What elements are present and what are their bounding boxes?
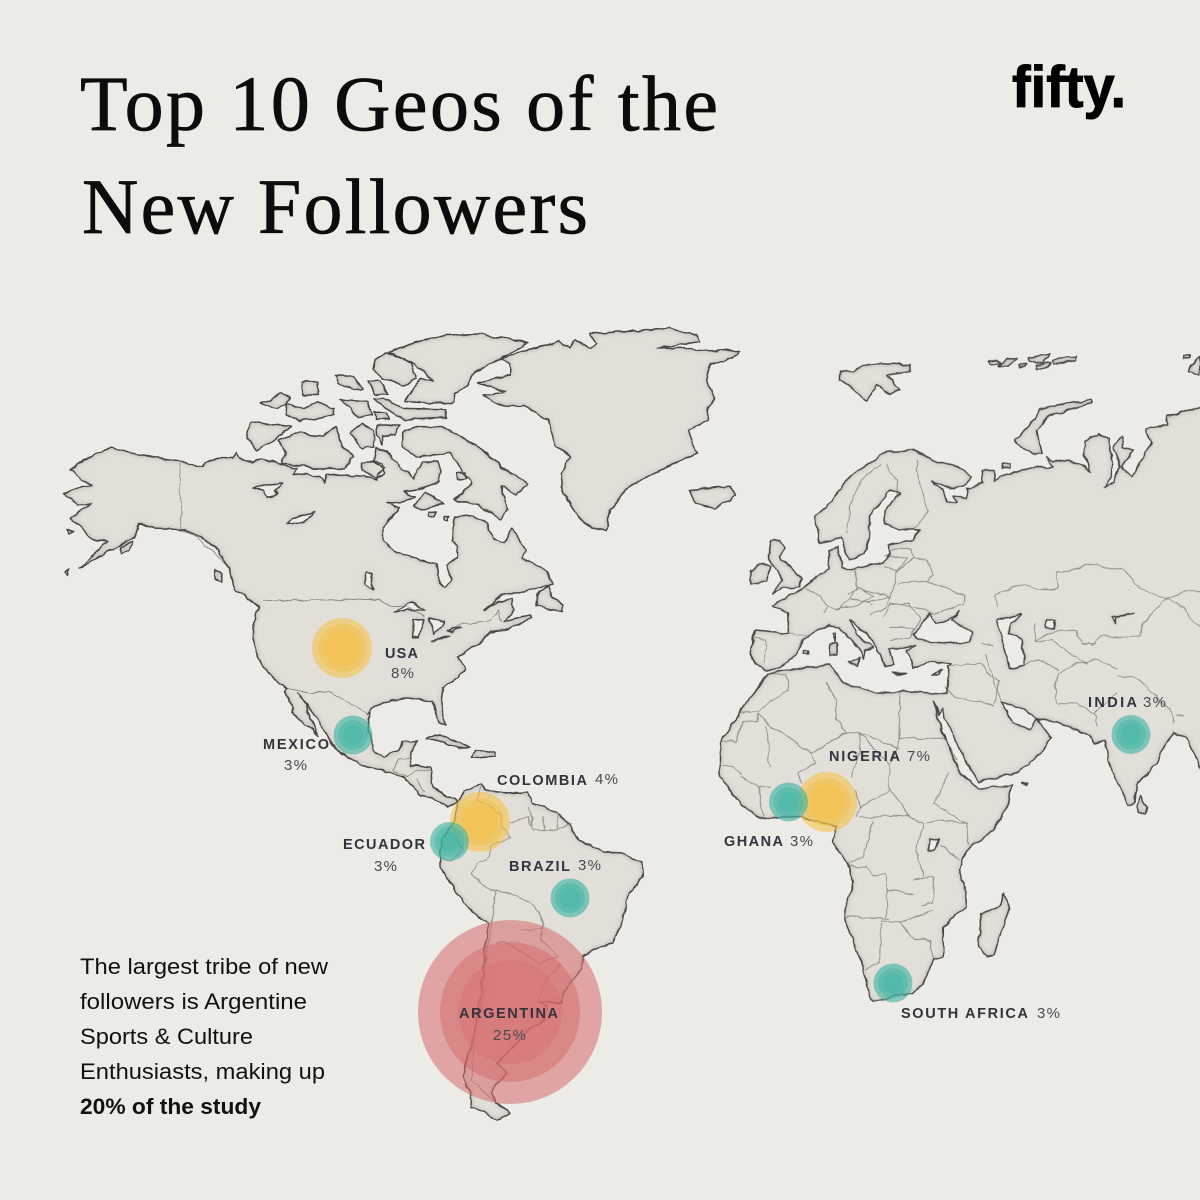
label: South Africa: 3% — [1037, 1005, 1060, 1022]
label: India: 3% — [1143, 694, 1166, 711]
bubble: Nigeria — [797, 772, 857, 832]
title: New Followers — [82, 163, 588, 250]
label: Brazil: BRAZIL — [509, 859, 570, 875]
land masses — [63, 328, 1200, 1120]
bubble: Brazil — [550, 878, 590, 918]
label: Brazil — [509, 857, 601, 875]
label: Mexico — [263, 737, 329, 774]
bubble: India — [1112, 715, 1150, 754]
label: Ecuador: 3% — [374, 858, 397, 875]
label: Colombia: 4% — [595, 771, 618, 788]
text block: study summary: Enthusiasts, making up — [80, 1059, 325, 1084]
label: India: INDIA — [1088, 695, 1138, 711]
bubble: Ecuador — [430, 822, 469, 861]
bubble: Colombia — [450, 792, 510, 852]
text block: study summary — [80, 954, 329, 1119]
country borders — [180, 460, 1200, 1100]
bubble: Mexico — [334, 716, 372, 754]
bubble: South Africa — [874, 964, 912, 1002]
text block: study summary: followers is Argentine — [80, 989, 307, 1014]
label: Ghana: 3% — [790, 833, 813, 850]
coastlines — [63, 328, 1200, 1120]
text block: study summary: Sports & Culture — [80, 1024, 253, 1049]
label: Brazil: 3% — [578, 857, 601, 874]
text block: study summary: The largest tribe of new — [80, 954, 329, 979]
label: USA: USA — [385, 646, 419, 662]
label: Colombia — [497, 771, 618, 789]
bubble: Argentina — [418, 920, 602, 1104]
label: Argentina: ARGENTINA — [459, 1006, 559, 1022]
label: Argentina — [459, 1006, 559, 1044]
label: Colombia: COLOMBIA — [497, 773, 588, 789]
title: Top 10 Geos of the — [80, 60, 718, 147]
logo: fifty.: fifty. — [1012, 55, 1126, 120]
label: South Africa: SOUTH AFRICA — [901, 1006, 1029, 1022]
label: India — [1088, 694, 1166, 711]
label: Mexico: 3% — [284, 757, 307, 774]
bubble: USA — [312, 618, 372, 678]
label: Ecuador: ECUADOR — [343, 837, 426, 853]
label: Argentina: 25% — [493, 1027, 526, 1044]
text block: study summary: 20% of the study — [80, 1094, 261, 1119]
label: USA — [385, 646, 419, 682]
label: Ghana — [724, 833, 813, 850]
label: Nigeria: 7% — [907, 748, 930, 765]
label: USA: 8% — [391, 665, 414, 682]
label: Mexico: MEXICO — [263, 737, 329, 753]
label: Nigeria: NIGERIA — [829, 749, 901, 765]
bubble: Ghana — [769, 782, 808, 822]
label: Ecuador — [343, 837, 426, 875]
world map — [63, 328, 1200, 1120]
label: Ghana: GHANA — [724, 834, 784, 850]
label: Nigeria — [829, 748, 930, 765]
title — [80, 60, 718, 250]
